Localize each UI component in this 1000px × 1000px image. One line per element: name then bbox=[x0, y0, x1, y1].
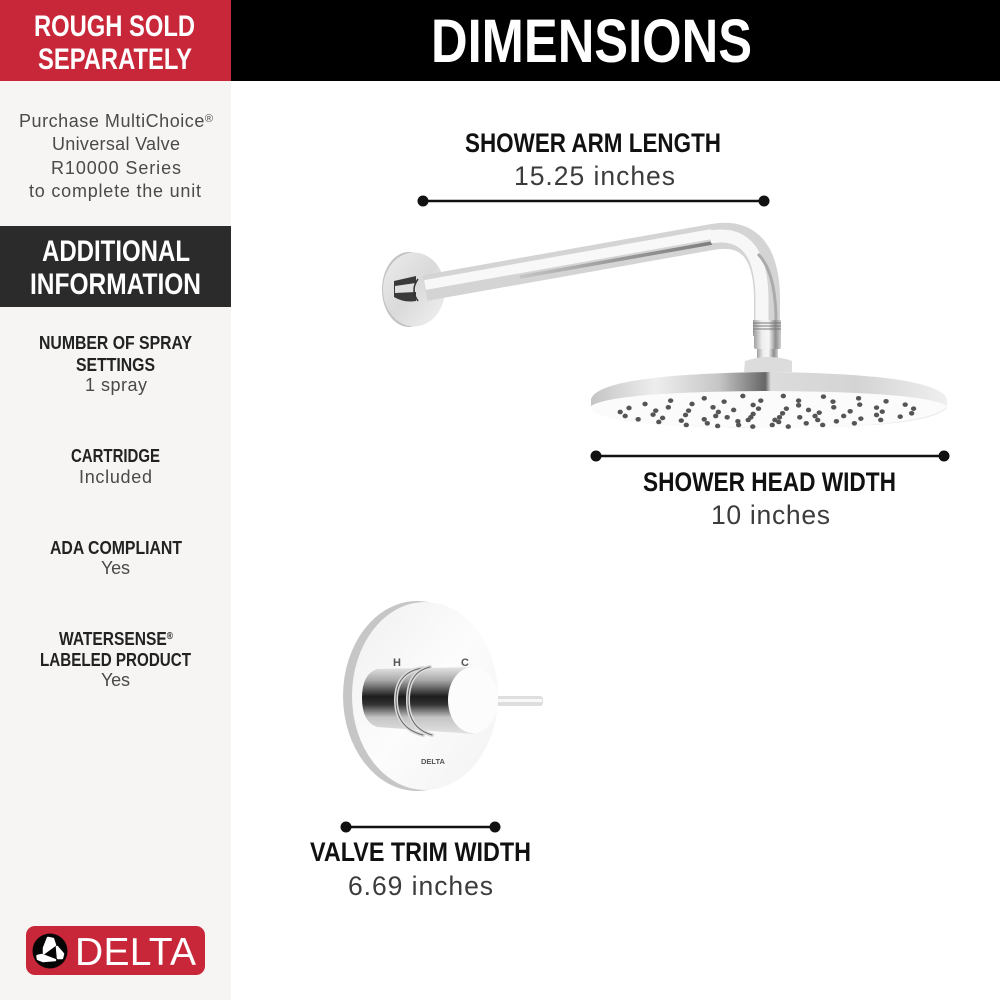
label: shower arm length: SHOWER ARM LENGTH bbox=[465, 128, 721, 158]
label: shower arm length bbox=[465, 128, 721, 191]
spec: watersense labeled product: WATERSENSE bbox=[59, 628, 187, 649]
plate marking: DELTA: DELTA bbox=[421, 757, 445, 766]
plate marking: C: C bbox=[461, 657, 469, 669]
text block: purchase note: Purchase MultiChoice bbox=[19, 111, 204, 131]
text block: purchase note: R10000 Series bbox=[51, 158, 181, 178]
title banner: dimensions: DIMENSIONS bbox=[431, 7, 752, 75]
spec: cartridge: CARTRIDGE bbox=[71, 445, 160, 466]
spec: number of spray settings: SETTINGS bbox=[76, 354, 155, 375]
dimension line: shower arm bbox=[418, 196, 770, 206]
text block: purchase note: to complete the unit bbox=[29, 181, 201, 201]
text block: purchase note: Universal Valve bbox=[52, 134, 180, 154]
knob rings bbox=[396, 667, 432, 735]
spec: watersense labeled product: LABELED PRODUCT bbox=[40, 649, 192, 670]
trim plate face bbox=[352, 602, 498, 790]
illustration: valve trim bbox=[343, 601, 543, 791]
heading: additional information bbox=[0, 226, 231, 307]
label: shower head width bbox=[643, 467, 896, 530]
label: shower head width: SHOWER HEAD WIDTH bbox=[643, 467, 896, 497]
label: valve trim width: 6.69 inches bbox=[348, 871, 493, 901]
spec: number of spray settings bbox=[39, 332, 193, 395]
temperature knob body bbox=[362, 667, 473, 734]
spec: ada compliant: Yes bbox=[101, 558, 130, 578]
illustration: shower arm and head bbox=[382, 234, 947, 429]
spec: number of spray settings: NUMBER OF SPRAY bbox=[39, 332, 193, 353]
shower head rim bbox=[591, 372, 947, 428]
spec: watersense labeled product: Yes bbox=[101, 670, 130, 690]
spec: watersense labeled product: ® bbox=[167, 631, 174, 642]
text block: purchase note: ® bbox=[205, 113, 213, 125]
left sidebar panel bbox=[0, 0, 231, 1000]
logo: delta bbox=[26, 926, 205, 975]
plate marking: H: H bbox=[393, 657, 401, 669]
banner: rough sold separately: SEPARATELY bbox=[38, 43, 192, 76]
knob end cap bbox=[448, 667, 498, 733]
banner: rough sold separately bbox=[0, 0, 231, 81]
text block: purchase note bbox=[19, 111, 213, 201]
spec: ada compliant: ADA COMPLIANT bbox=[50, 537, 183, 558]
trim plate edge bbox=[343, 601, 491, 791]
heading: additional information: ADDITIONAL bbox=[42, 235, 190, 268]
dimension line: valve trim bbox=[340, 822, 500, 832]
spec: cartridge: Included bbox=[79, 467, 152, 487]
swivel nut and collar bbox=[744, 331, 792, 372]
label: shower head width: 10 inches bbox=[711, 500, 830, 530]
wall flange bbox=[382, 252, 445, 327]
shower head face bbox=[591, 391, 947, 428]
title banner: dimensions bbox=[231, 0, 1000, 81]
banner: rough sold separately: ROUGH SOLD bbox=[34, 10, 195, 43]
spec: ada compliant bbox=[50, 537, 183, 578]
threaded joint bbox=[753, 320, 781, 336]
lever bbox=[496, 696, 543, 706]
spec: cartridge bbox=[71, 445, 160, 487]
logo: delta: DELTA bbox=[75, 931, 196, 974]
spec: watersense labeled product bbox=[40, 628, 192, 690]
label: shower arm length: 15.25 inches bbox=[514, 161, 675, 191]
label: valve trim width bbox=[310, 837, 531, 901]
spec: number of spray settings: 1 spray bbox=[85, 375, 147, 395]
spray nozzles bbox=[618, 394, 916, 429]
dimension line: shower head bbox=[590, 450, 950, 462]
label: valve trim width: VALVE TRIM WIDTH bbox=[310, 837, 531, 867]
arm tube bbox=[414, 234, 776, 322]
heading: additional information: INFORMATION bbox=[30, 268, 201, 301]
